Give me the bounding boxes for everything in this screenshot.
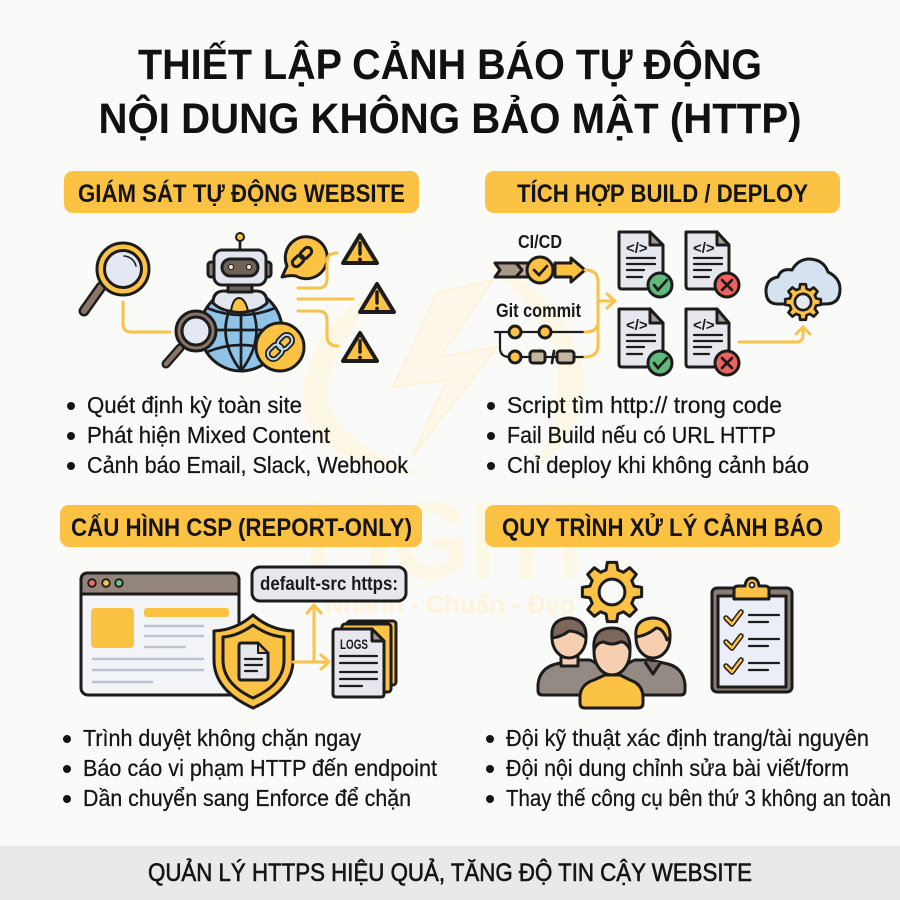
- bullet list: Quét định kỳ toàn site: [87, 392, 302, 418]
- icon: gear: [582, 562, 642, 622]
- connectors to warnings: [298, 253, 353, 346]
- watermark logo: LIGHT: [304, 479, 600, 602]
- icon: code file failed 1: </>: [693, 240, 715, 257]
- icon: code file ok 2: [619, 309, 672, 375]
- heading badge: [485, 505, 840, 547]
- bullet list: [487, 392, 809, 478]
- watermark logo: Nhanh - Chuẩn - Đẹp: [325, 591, 575, 619]
- bullet list: Phát hiện Mixed Content: [87, 422, 331, 448]
- icon: code file ok 2: </>: [626, 317, 648, 334]
- CI/CD pipeline: [495, 232, 585, 283]
- panel: giám sát tự động website: [64, 171, 419, 478]
- icon: browser window: [81, 573, 239, 695]
- policy box: default-src https: default-src https:: [260, 574, 398, 595]
- heading badge: GIÁM SÁT TỰ ĐỘNG WEBSITE: [78, 178, 405, 208]
- connector: magnifier to robot: [123, 302, 170, 332]
- heading badge: [60, 505, 422, 547]
- footer banner: QUẢN LÝ HTTPS HIỆU QUẢ, TĂNG ĐỘ TIN CẬY WEBSITE: [148, 857, 752, 887]
- heading badge: QUY TRÌNH XỬ LÝ CẢNH BÁO: [502, 512, 823, 542]
- icon: warning triangle 1: [343, 235, 377, 263]
- icon: code file failed 1: [686, 232, 739, 297]
- icon: small magnifier on globe: [166, 311, 216, 364]
- icon: cloud with gear: [766, 259, 840, 320]
- bullet list: Đội kỹ thuật xác định trang/tài nguyên: [506, 725, 869, 751]
- bullet list: Đội nội dung chỉnh sửa bài viết/form: [506, 755, 849, 781]
- icon: link badge: [256, 323, 304, 371]
- icon: shield with document: [214, 615, 293, 708]
- arrow: pipeline to code files: [585, 270, 615, 357]
- bullet list: Báo cáo vi phạm HTTP đến endpoint: [83, 755, 438, 781]
- heading badge: [485, 171, 840, 213]
- CI/CD pipeline: CI/CD: [518, 232, 562, 252]
- panel: tích hợp build / deploy: [485, 171, 840, 478]
- icon: logs document stack: LOGS: [340, 636, 368, 652]
- title: [98, 40, 802, 143]
- policy box: default-src https: [252, 567, 406, 601]
- icon: code file failed 2: [686, 309, 739, 375]
- git commit graph: [495, 301, 585, 363]
- panel: cấu hình csp: [60, 505, 438, 811]
- bullet list: Cảnh báo Email, Slack, Webhook: [87, 452, 408, 478]
- icon: globe and robot: [200, 233, 282, 371]
- bullet list: Chỉ deploy khi không cảnh báo: [507, 452, 809, 478]
- bullet list: [67, 392, 408, 478]
- icon: clipboard checklist: [712, 578, 792, 692]
- icon: team of three people: [538, 618, 685, 708]
- title: NỘI DUNG KHÔNG BẢO MẬT (HTTP): [98, 94, 802, 143]
- bullet list: Trình duyệt không chặn ngay: [83, 725, 361, 751]
- arrows: shield to policy and logs: [293, 605, 329, 669]
- icon: logs document stack: [333, 621, 396, 697]
- icon: code file failed 2: </>: [693, 317, 715, 334]
- icon: code file ok 1: [619, 232, 672, 297]
- heading badge: [64, 171, 419, 213]
- icon: large magnifier: [84, 243, 149, 311]
- icon: warning triangle 2: [360, 284, 394, 312]
- icon: link speech bubble: [282, 237, 327, 279]
- footer banner: [0, 846, 900, 900]
- bullet list: Script tìm http:// trong code: [507, 392, 782, 418]
- bullet list: [486, 725, 891, 811]
- icon: warning triangle 3: [343, 333, 377, 361]
- icon: code file ok 1: </>: [626, 240, 648, 257]
- bullet list: Fail Build nếu có URL HTTP: [507, 422, 776, 448]
- arrow: files to cloud: [739, 327, 810, 342]
- panel: quy trình xử lý cảnh báo: [485, 505, 891, 811]
- git commit graph: Git commit: [496, 301, 582, 322]
- heading badge: CẤU HÌNH CSP (REPORT-ONLY): [71, 513, 412, 542]
- bullet list: Dần chuyển sang Enforce để chặn: [83, 785, 411, 811]
- watermark logo: [303, 262, 600, 619]
- title: THIẾT LẬP CẢNH BÁO TỰ ĐỘNG: [138, 40, 762, 89]
- heading badge: TÍCH HỢP BUILD / DEPLOY: [517, 179, 808, 208]
- bullet list: [63, 725, 438, 811]
